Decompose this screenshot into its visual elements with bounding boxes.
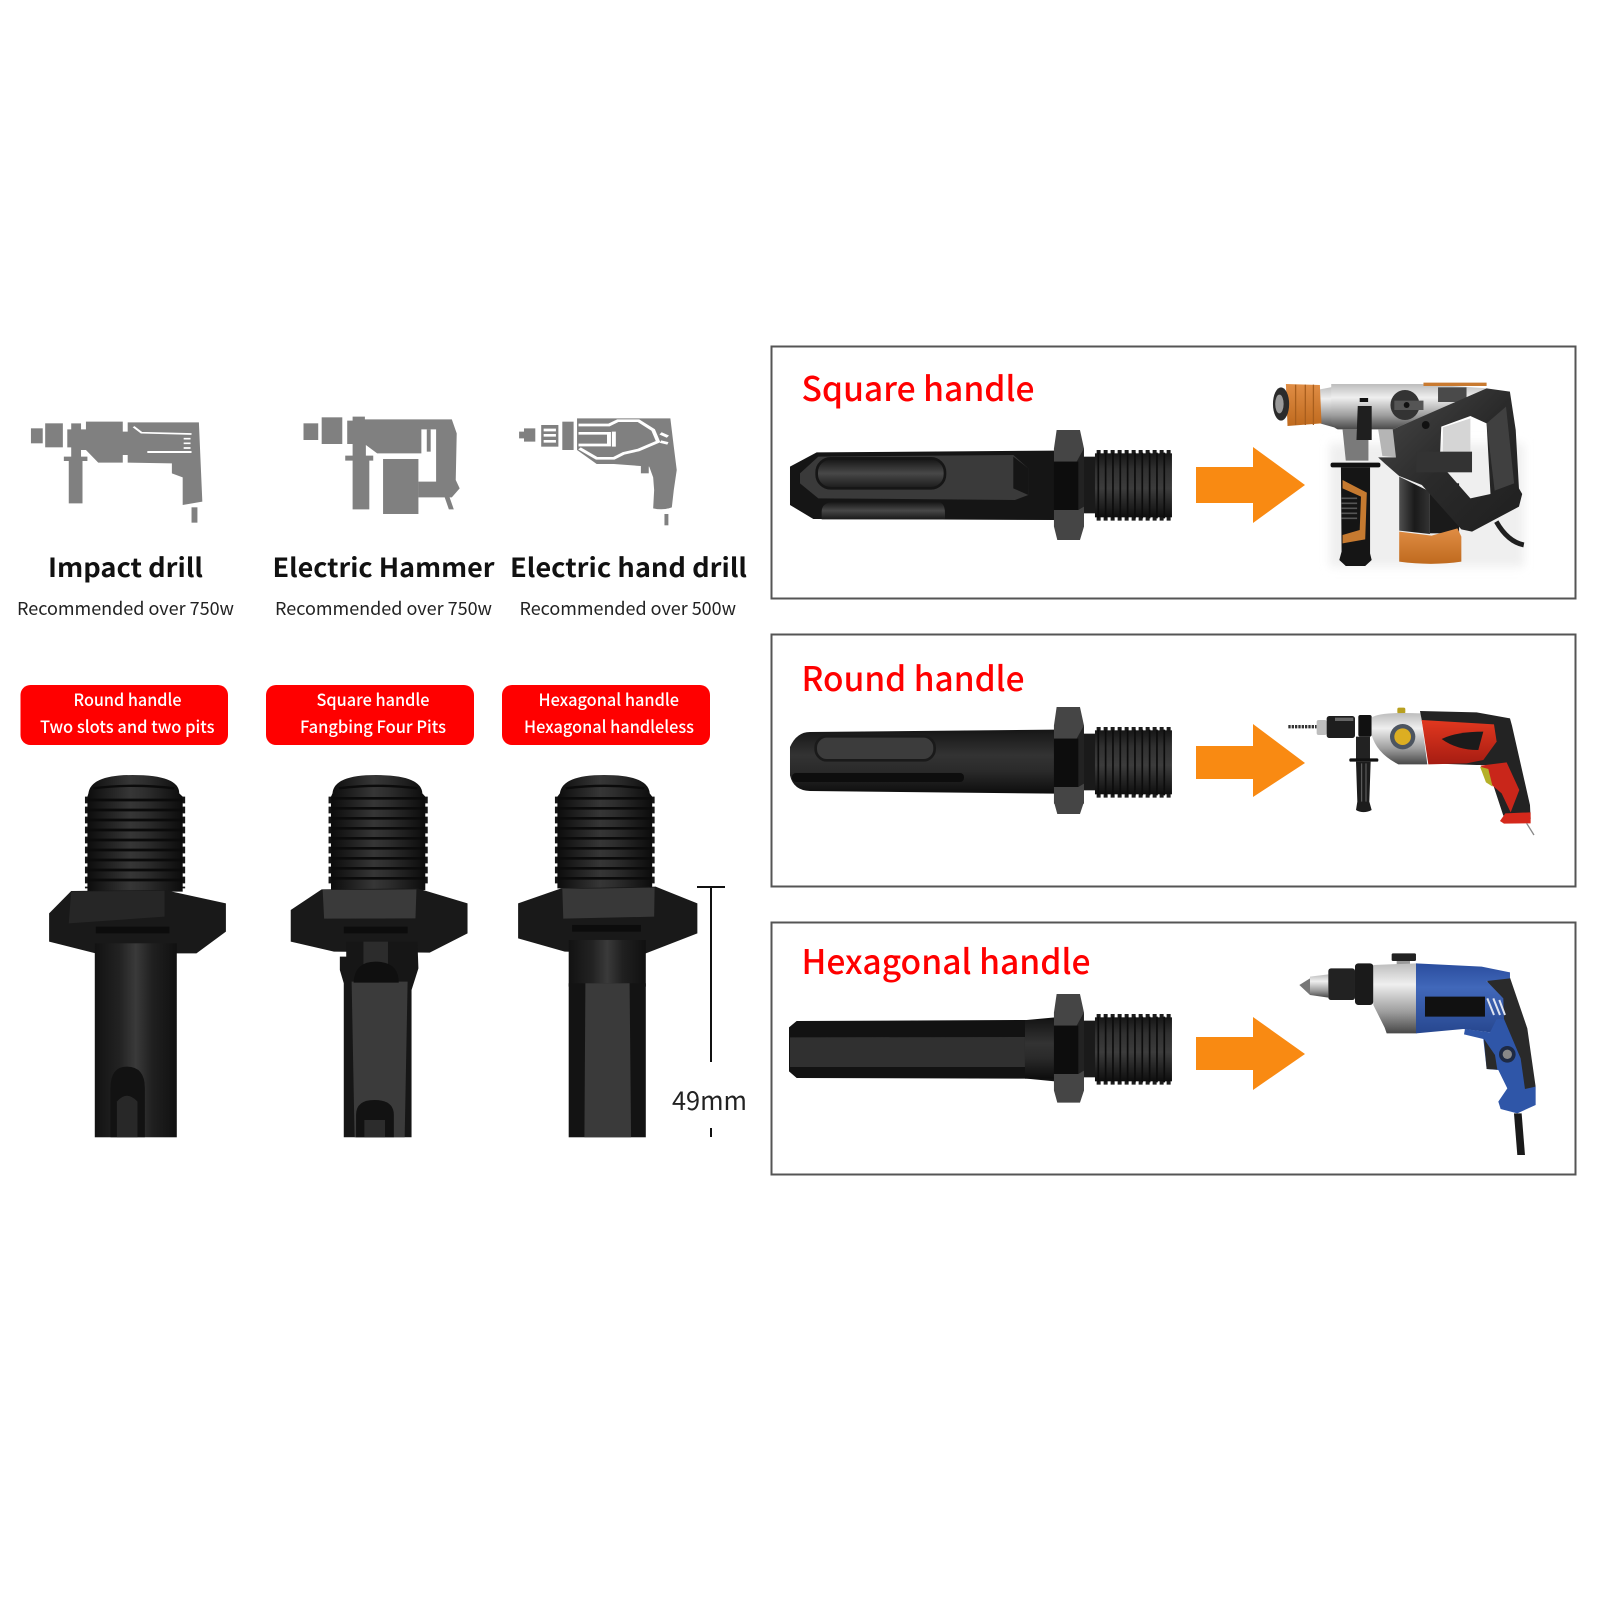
adapter: hexagonal handle, side view [789, 994, 1172, 1103]
text: electric hand drill power: Recommended over 500w [520, 595, 736, 621]
heading: round handle: Round handle [802, 652, 1024, 701]
icon: electric hand drill [519, 418, 677, 525]
adapter: square handle, side view [790, 430, 1172, 540]
panel: round handle [772, 634, 1576, 886]
adapter: round handle, end view [49, 775, 226, 1137]
panel: tool types [17, 417, 747, 621]
panel: square handle [772, 346, 1576, 598]
adapter: hexagonal handle, end view [518, 775, 697, 1137]
dimension: 49mm: 49mm [672, 1081, 747, 1118]
badge: hexagonal handle [502, 685, 710, 745]
badge: square handle: Fangbing Four Pits [300, 713, 446, 738]
image: blue impact drill [1299, 953, 1536, 1155]
heading: square handle: Square handle [802, 362, 1034, 411]
panel: hexagonal handle [772, 922, 1576, 1174]
icon: impact drill [31, 422, 202, 523]
image: red impact drill [1288, 708, 1534, 835]
text: electric hammer power: Recommended over 750w [275, 595, 492, 621]
badge: hexagonal handle: Hexagonal handleless [524, 713, 694, 738]
arrow [1196, 724, 1305, 797]
arrow [1196, 1017, 1305, 1090]
heading: electric hammer: Electric Hammer [272, 548, 495, 585]
badge: round handle: Two slots and two pits [40, 713, 214, 738]
heading: electric hand drill: Electric hand drill [510, 548, 747, 585]
badge: square handle: Square handle [316, 686, 430, 711]
icon: electric hammer [303, 417, 460, 514]
heading: hexagonal handle: Hexagonal handle [802, 935, 1090, 984]
adapter: square handle, end view [291, 775, 468, 1137]
badge: round handle [20, 685, 228, 745]
dimension: 49mm [672, 887, 747, 1137]
badge: round handle: Round handle [74, 686, 182, 711]
arrow [1196, 447, 1305, 523]
image: rotary hammer with orange accents [1273, 383, 1524, 567]
adapter: round handle, side view [790, 707, 1172, 814]
text: impact drill power: Recommended over 750w [17, 595, 234, 621]
badge: hexagonal handle: Hexagonal handle [538, 686, 679, 711]
badge: square handle [266, 685, 474, 745]
heading: impact drill: Impact drill [48, 548, 203, 585]
